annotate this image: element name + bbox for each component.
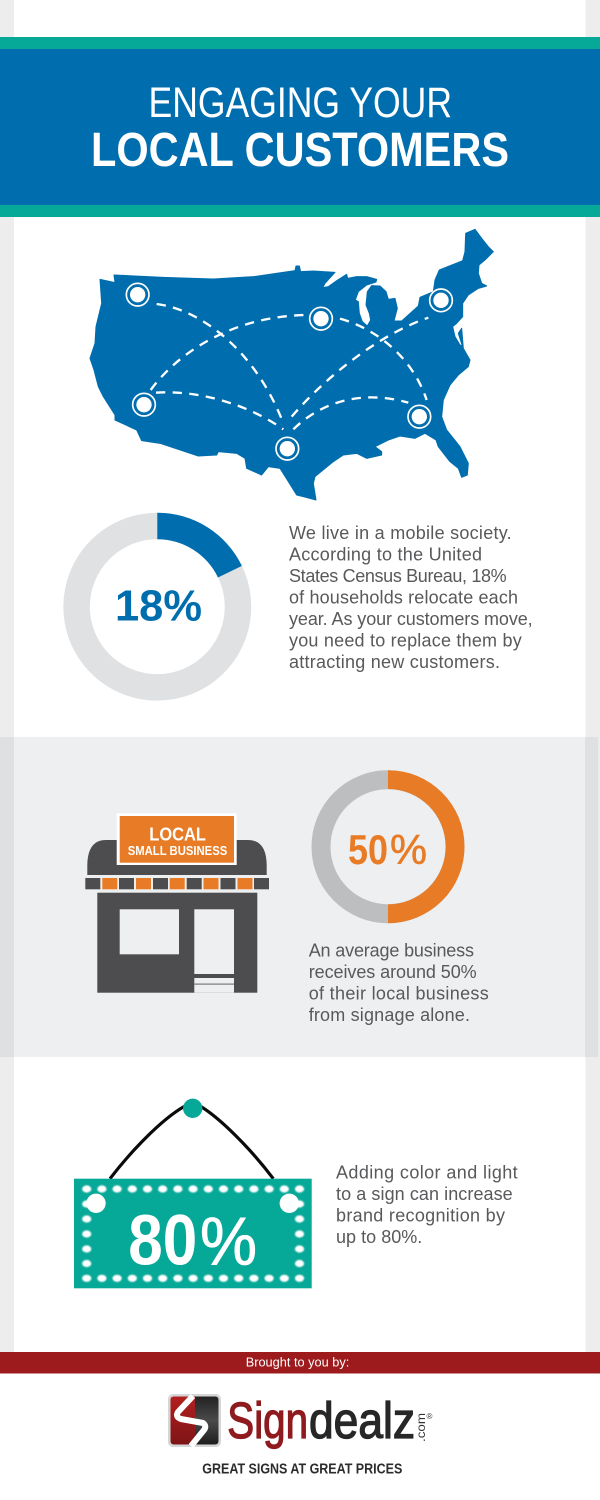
header banner (0, 37, 600, 217)
text: color and light: Adding color and light (336, 1162, 518, 1182)
title: LOCAL CUSTOMERS (91, 124, 509, 177)
text: signage business (309, 941, 489, 1025)
text: color and light (336, 1162, 518, 1247)
logo: Signdealz: ® (426, 1412, 432, 1421)
text: signage business: An average business (309, 941, 474, 961)
text: mobile society: According to the United (289, 544, 482, 564)
icon: hanging sign 80% (74, 1099, 312, 1288)
text: mobile society: you need to replace them by (289, 630, 522, 650)
donut chart: 18%: 18% (115, 582, 202, 631)
donut chart: 18% (77, 513, 242, 687)
sign figure: % (200, 1204, 257, 1280)
shop sign: LOCAL (149, 825, 206, 845)
logo: Signdealz (168, 1392, 432, 1477)
text: color and light: to a sign can increase (336, 1184, 513, 1204)
text: mobile society: of households relocate each (289, 588, 518, 608)
icon: storefront (85, 813, 269, 993)
footer bar: brought to you by (0, 1352, 600, 1374)
tagline: GREAT SIGNS AT GREAT PRICES (202, 1461, 403, 1477)
text: mobile society: We live in a mobile society. (289, 523, 512, 543)
title (91, 79, 509, 177)
sign board (74, 1179, 312, 1288)
donut chart: 50% (321, 770, 464, 923)
awning stripes (85, 878, 269, 889)
sign hanging holes (86, 1194, 299, 1213)
title: ENGAGING YOUR (148, 79, 452, 127)
donut chart: 50%: % (390, 826, 427, 873)
text: mobile society: year. As your customers move, (289, 609, 533, 629)
wordmark: Sign (227, 1392, 308, 1449)
light bulbs glow (82, 1185, 304, 1282)
shop sign: SMALL BUSINESS (128, 843, 228, 858)
map of the United States with routes (90, 229, 493, 500)
text: signage business: from signage alone. (309, 1005, 470, 1025)
panel: local signage band (0, 737, 600, 1057)
dashed routes (151, 304, 428, 429)
logo: Signdealz: .com (414, 1413, 428, 1442)
text: mobile society (289, 523, 533, 672)
sign figure: 80 (128, 1202, 197, 1280)
cord (110, 1106, 273, 1179)
text: signage business: receives around 50% (309, 962, 477, 982)
footer bar: brought to you by: Brought to you by: (246, 1355, 349, 1370)
text: mobile society: attracting new customers. (289, 652, 500, 672)
shop sign (117, 813, 237, 865)
text: color and light: up to 80%. (336, 1227, 422, 1247)
awning (87, 840, 267, 875)
building (97, 893, 257, 993)
location markers (126, 283, 452, 460)
pin (183, 1099, 202, 1118)
text: mobile society: States Census Bureau, 18% (289, 566, 507, 586)
sign figure (128, 1202, 257, 1280)
text: signage business: of their local business (309, 983, 489, 1003)
logo: Signdealz: dealz (309, 1392, 415, 1449)
text: color and light: brand recognition by (336, 1206, 505, 1226)
donut chart: 50%: 50 (348, 826, 388, 873)
logo icon (168, 1394, 221, 1447)
